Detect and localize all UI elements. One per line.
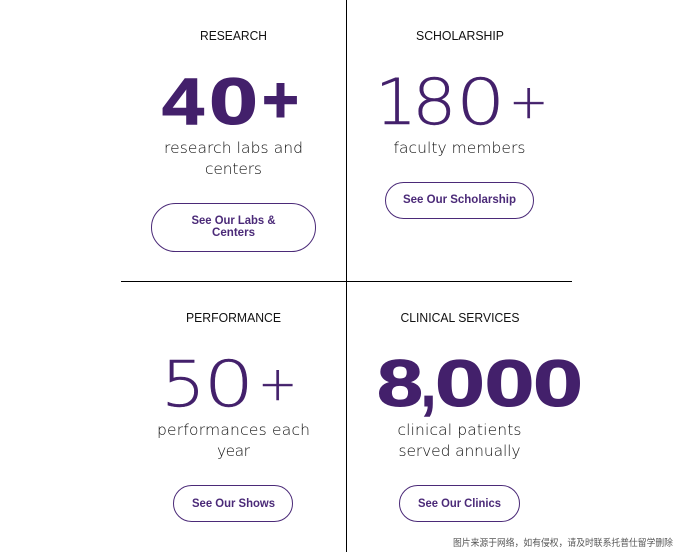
button: labs and centers: See Our Labs & — [192, 213, 276, 227]
heading: clinical services: CLINICAL SERVICES — [400, 311, 520, 325]
description: faculty members: faculty members — [394, 139, 526, 157]
stat: 180+: 1 — [375, 66, 417, 139]
heading: performance: PERFORMANCE — [186, 311, 281, 325]
panel: scholarship — [375, 29, 548, 218]
stat: 40+: 0 — [209, 64, 258, 138]
stat: 8,000: 0 — [484, 346, 534, 420]
stat: 40+: + — [262, 62, 299, 136]
description: performances: performances each — [157, 421, 310, 439]
stat: 8,000: 0 — [533, 346, 583, 420]
stat: 180+: + — [509, 75, 548, 130]
description: performances: year — [217, 442, 251, 460]
panel: performance — [157, 311, 310, 522]
button: labs and centers: Centers — [212, 225, 255, 239]
button: scholarship — [386, 182, 534, 218]
stat: 50+: 5 — [161, 348, 206, 421]
stat: 50+: + — [258, 357, 297, 412]
stat: 8,000: 0 — [435, 346, 485, 420]
stat: 8,000: 8 — [377, 346, 423, 420]
description: clinical patients: clinical patients — [398, 421, 522, 439]
heading: research: RESEARCH — [200, 29, 267, 43]
button: shows — [174, 486, 292, 522]
stat: 50+: 0 — [204, 348, 254, 421]
heading: scholarship: SCHOLARSHIP — [416, 29, 504, 43]
button: scholarship: See Our Scholarship — [403, 192, 516, 206]
description: research labs: centers — [205, 160, 262, 178]
panel: clinical services — [377, 311, 583, 522]
stat: 8,000: , — [421, 346, 436, 420]
button: shows: See Our Shows — [192, 496, 275, 510]
description: clinical patients: served annually — [398, 442, 520, 460]
description: research labs: research labs and — [164, 139, 303, 157]
stat: 180+: 8 — [412, 66, 457, 139]
button: labs and centers — [152, 204, 316, 252]
button: clinics: See Our Clinics — [418, 496, 501, 510]
button: clinics — [400, 486, 520, 522]
panel: research — [152, 29, 316, 252]
stat: 180+: 0 — [456, 66, 505, 139]
stat: 40+: 4 — [162, 64, 204, 138]
